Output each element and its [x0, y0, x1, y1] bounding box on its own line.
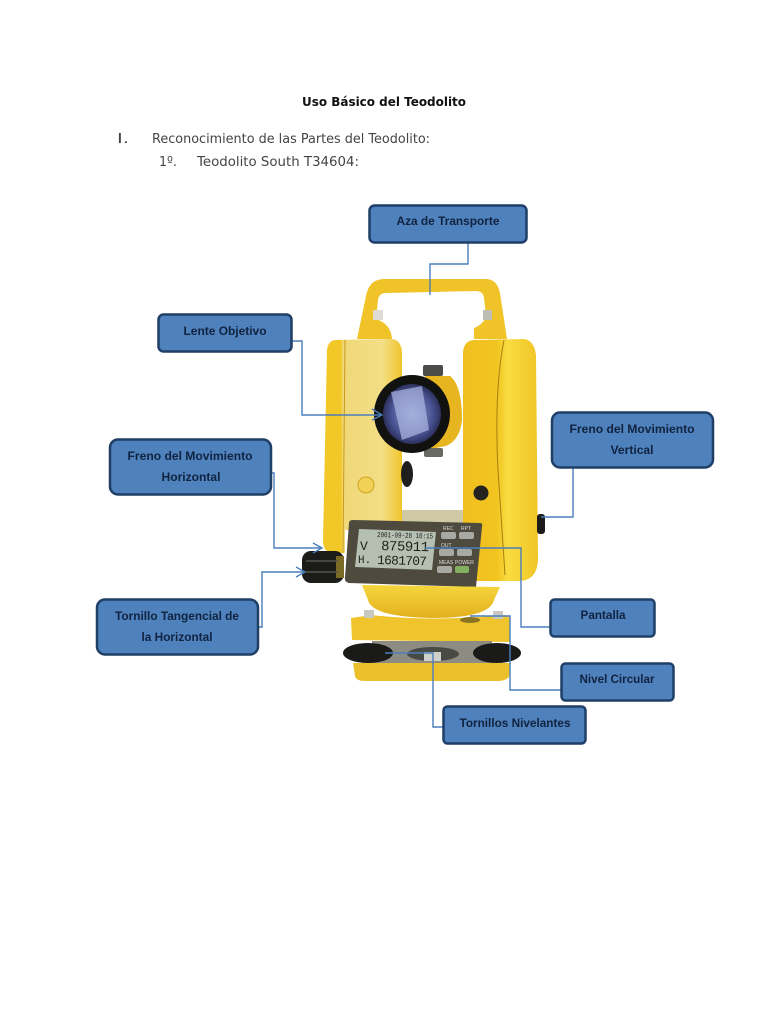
carrying handle [357, 279, 507, 339]
label: Lente Objetivo [158, 314, 292, 352]
telescope barrel [425, 376, 462, 450]
LCD readout: H. [358, 555, 371, 567]
base plate [353, 663, 510, 681]
label: Tornillo Tangencial de la Horizontal [97, 600, 258, 654]
label: Nivel Circular [562, 664, 674, 700]
circular level [460, 617, 480, 623]
LCD readout: V [360, 539, 368, 554]
side clamp screw [537, 514, 545, 534]
keypad: POWER [455, 560, 474, 566]
levelling screws [372, 641, 492, 664]
label: Aza de Transporte: Aza de Transporte [396, 214, 500, 228]
left standard [323, 339, 402, 553]
objective lens [374, 375, 450, 453]
label: Aza de Transporte [370, 206, 526, 242]
connector: Pantalla [425, 548, 550, 627]
subsection heading: Teodolito South T34604: [196, 155, 359, 170]
label: Tornillos Nivelantes: Tornillos Nivelantes [460, 716, 571, 730]
section heading: Reconocimiento de las Partes del Teodolito: [152, 132, 430, 147]
label: Pantalla: Pantalla [580, 608, 626, 622]
keypad: REC [443, 526, 454, 532]
LCD readout: 875911 [381, 539, 429, 556]
label: Freno del Movimiento Horizontal [110, 440, 271, 494]
label: Tornillo Tangencial de la Horizontal: Tornillo Tangencial de [115, 609, 239, 623]
connector: Tornillos Nivelantes [385, 653, 443, 727]
LCD screen [355, 529, 436, 570]
label: Tornillos Nivelantes [444, 706, 586, 744]
label: Freno del Movimiento Vertical: Freno del Movimiento [570, 422, 694, 436]
label: Lente Objetivo: Lente Objetivo [184, 324, 266, 338]
theodolite instrument illustration [302, 279, 545, 681]
label: Tornillo Tangencial de la Horizontal: la Horizontal [142, 630, 212, 644]
LCD readout: 1681707 [377, 553, 427, 569]
LCD readout: 2001-09-28 10:15 [377, 532, 433, 541]
right standard [463, 339, 538, 581]
label: Freno del Movimiento Vertical: Vertical [610, 443, 654, 457]
subsection heading: 1º. [159, 155, 177, 170]
label: Pantalla [550, 600, 654, 636]
LCD readout [358, 532, 433, 569]
connector with arrow: Freno del Movimiento Horizontal [226, 473, 322, 553]
tribrach plate [351, 615, 510, 642]
label: Freno del Movimiento Horizontal: Freno del Movimiento [128, 449, 252, 463]
focus knob [401, 461, 413, 487]
connector with arrow: Lente Objetivo [292, 341, 382, 420]
keypad [437, 526, 474, 573]
keypad: OUT [441, 543, 452, 549]
section heading: I. [117, 132, 129, 147]
centre bridge [402, 510, 463, 525]
label: Freno del Movimiento Horizontal: Horizontal [162, 470, 220, 484]
connector: Freno del Movimiento Vertical [541, 468, 573, 517]
connector: Nivel Circular [470, 616, 561, 690]
title: Uso Básico del Teodolito [302, 94, 466, 109]
keypad: MEAS [439, 560, 454, 566]
connector with arrow: Tornillo Tangencial [220, 567, 305, 627]
keypad: RPT [461, 526, 471, 532]
display control panel [345, 520, 482, 587]
rotating base [362, 585, 500, 618]
label: Freno del Movimiento Vertical [552, 412, 713, 468]
label: Nivel Circular: Nivel Circular [580, 672, 655, 686]
connector: Aza de Transporte [430, 243, 468, 295]
small round details [474, 486, 488, 500]
horizontal clamp and tangent knobs [302, 551, 344, 583]
